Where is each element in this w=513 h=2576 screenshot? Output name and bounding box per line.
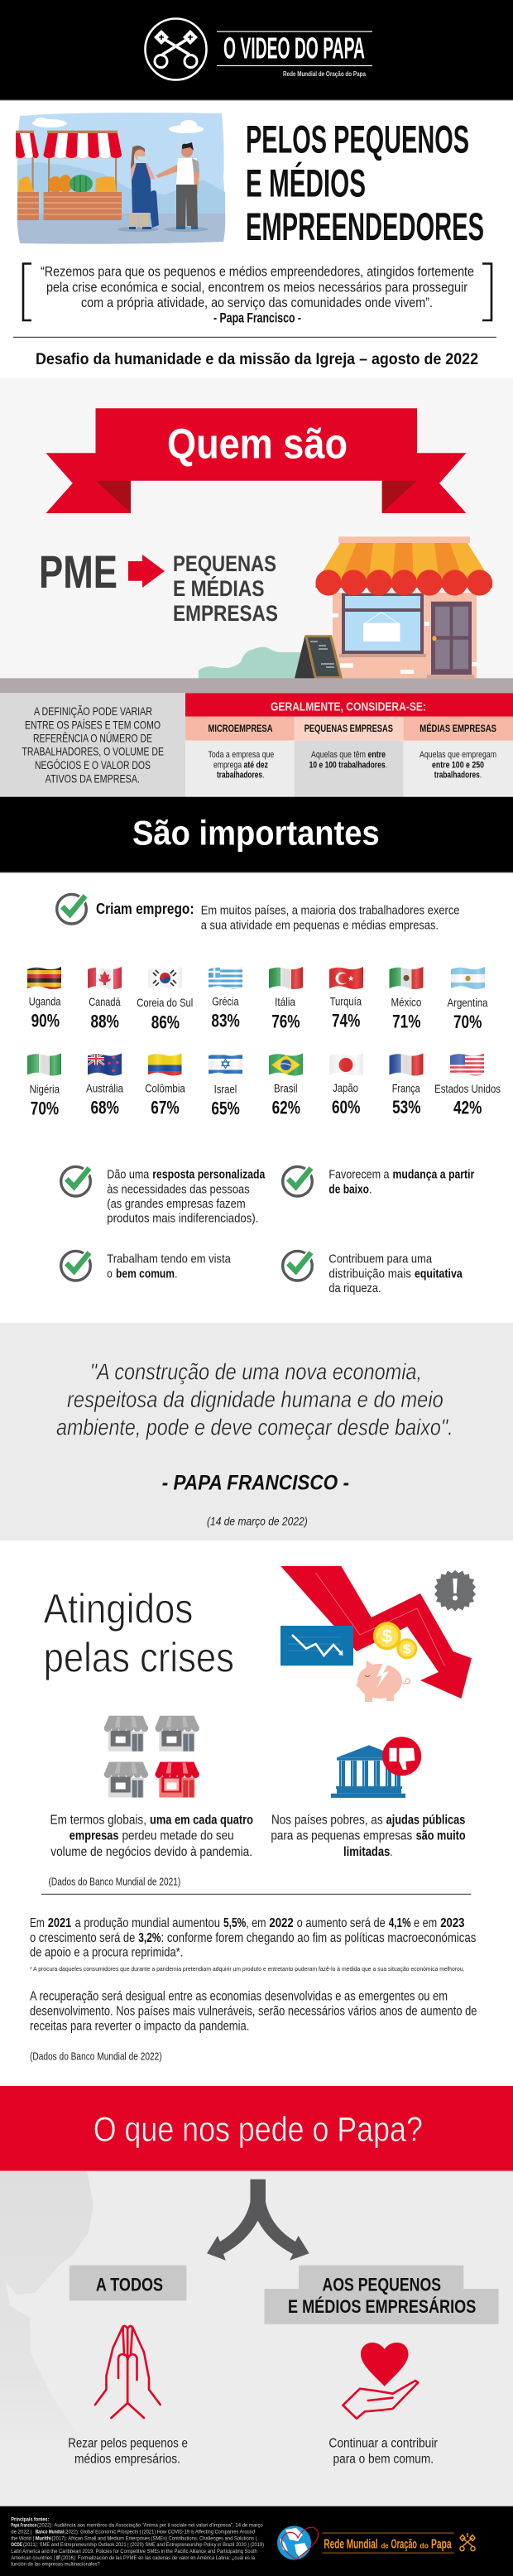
text block: world production growth: de apoio e a procura reprimida*. xyxy=(30,1946,183,1960)
country: Estados Unidos: 42% xyxy=(453,1098,482,1118)
illustration: falling arrow with coins and piggy bank xyxy=(280,1566,476,1702)
text block: world production growth: 4,1% xyxy=(389,1916,411,1930)
block: Criam emprego: Em muitos países, a maioria dos trabalhadores exerce xyxy=(201,903,460,917)
country: França: França xyxy=(392,1081,420,1094)
sources: Latin America and the Caribbean 2019. Policies for Competitive SMEs in the Pacific Alliance and Participating South xyxy=(11,2549,257,2554)
sources: (2022): Audiência aos membros da Associação "Anima per il sociale nei valori d'impresa", 14 de março xyxy=(37,2523,263,2529)
heading: Atingidos pelas crises: Atingidos xyxy=(44,1586,193,1632)
header: O Video do Papa logo: Rede Mundial de Oração do Papa xyxy=(283,70,366,78)
icon: warning burst xyxy=(434,1570,476,1611)
panel: what the Pope asks xyxy=(0,2171,513,2506)
sources: the World | xyxy=(11,2535,34,2541)
text block: world production growth: a produção mundial aumentou xyxy=(74,1916,220,1930)
table: company sizes: entre 100 e 250 xyxy=(432,760,484,770)
benefit: mudança a partir de baixo: de baixo xyxy=(328,1182,369,1196)
text block: world production growth: , em xyxy=(246,1916,266,1930)
block: limited public aid: são muito xyxy=(416,1829,466,1843)
panel: definition note: ATIVOS DA EMPRESA. xyxy=(46,771,140,785)
logo: Rede Mundial de Oração do Papa: Rede Mundial xyxy=(324,2537,378,2551)
panel: Pope quote: (14 de março de 2022) xyxy=(207,1515,308,1528)
country: Nigéria xyxy=(27,1053,61,1119)
country: Argentina: Argentina xyxy=(447,996,488,1009)
text block: uneven recovery: receitas para reverter o impacto da pandemia. xyxy=(30,2019,249,2033)
country: França xyxy=(389,1053,424,1117)
benefit: resposta personalizada: Dão uma xyxy=(107,1167,150,1181)
table: company sizes: até dez xyxy=(243,760,268,770)
sources: (2017): African Small and Medium Enterprises (SMEs) Contributions, Challenges and Solutions | xyxy=(51,2535,256,2541)
block: limited public aid: para as pequenas empresas xyxy=(271,1829,412,1843)
title xyxy=(246,118,484,249)
country: Nigéria: 70% xyxy=(31,1098,59,1119)
table: company sizes: MICROEMPRESA xyxy=(209,723,273,734)
text block: world production growth: Em xyxy=(30,1916,45,1930)
table: company sizes: . xyxy=(262,770,265,780)
block: limited public aid: . xyxy=(390,1845,392,1859)
flags chart: employment share by country, row 2 xyxy=(27,1053,501,1119)
text block: world production growth: 3,2% xyxy=(138,1931,161,1945)
table: company sizes: emprega xyxy=(213,760,242,770)
icon: heart in hand xyxy=(343,2343,418,2419)
block: limited public aid: limitadas xyxy=(343,1845,390,1859)
country: Uganda: 90% xyxy=(31,1011,60,1031)
country: Japão: 60% xyxy=(332,1097,360,1117)
sources: función de las empresas multinacionales? xyxy=(11,2561,100,2567)
sources: American countries | xyxy=(11,2555,55,2561)
country: Colômbia xyxy=(145,1053,185,1118)
PME definition xyxy=(39,545,278,626)
country: Coreia do Sul: 86% xyxy=(151,1012,180,1032)
block: A todos: Rezar pelos pequenos e xyxy=(68,2437,188,2451)
block: Aos pequenos e médios empresários: Continuar a contribuir xyxy=(328,2437,438,2451)
icon: crossed keys emblem xyxy=(146,18,207,79)
country: Argentina xyxy=(447,966,488,1032)
country: Canadá xyxy=(88,966,122,1031)
block: Aos pequenos e médios empresários: E MÉDIOS EMPRESÁRIOS xyxy=(288,2296,476,2317)
sources: de 2022 | xyxy=(11,2529,32,2535)
illustration: shop xyxy=(199,536,492,679)
country: Itália: 76% xyxy=(271,1011,300,1031)
block: limited public aid: Nos países pobres, as xyxy=(271,1813,383,1827)
benefit: resposta personalizada: resposta personalizada xyxy=(152,1167,266,1181)
PME definition: PME xyxy=(39,545,117,598)
panel: definition note: ENTRE OS PAÍSES E TEM COMO xyxy=(25,718,161,731)
table: company sizes: 10 e 100 trabalhadores xyxy=(309,760,386,770)
source: World Bank 2021: (Dados do Banco Mundial de 2021) xyxy=(48,1877,180,1888)
block: Criam emprego: Criam emprego: xyxy=(96,901,194,917)
sources: (2022): Global Economic Prospects | (2021) How COVID-19 is Affecting Companies Around xyxy=(65,2529,255,2535)
country: Colômbia: 67% xyxy=(151,1098,180,1118)
text block: world production growth: 2022 xyxy=(269,1916,294,1930)
heading: Atingidos pelas crises: pelas crises xyxy=(44,1634,234,1680)
block: one in four businesses: volume de negócios devido à pandemia. xyxy=(50,1845,252,1859)
block: Aos pequenos e médios empresários: para o bem comum. xyxy=(333,2452,434,2466)
block: limited public aid: ajudas públicas xyxy=(386,1813,465,1827)
country: Canadá: Canadá xyxy=(89,995,121,1008)
panel: Pope quote: respeitosa da dignidade humana e do meio xyxy=(67,1387,443,1412)
sources: (2016): Formalización de las PYME en las cadenas de valor en América Latina: ¿cuál es la xyxy=(61,2555,255,2561)
benefit: mudança a partir de baixo xyxy=(283,1166,474,1196)
sources: Banco Mundial xyxy=(36,2529,64,2535)
block: Criam emprego: a sua atividade em pequenas e médias empresas. xyxy=(201,918,439,932)
block: one in four businesses: uma em cada quatro xyxy=(150,1813,253,1827)
country: México: 71% xyxy=(392,1011,420,1031)
icon: four shops, one red xyxy=(104,1716,199,1798)
table: company sizes: trabalhadores xyxy=(434,770,480,780)
benefit: resposta personalizada: (as grandes empresas fazem xyxy=(107,1197,246,1211)
country: Uganda: Uganda xyxy=(29,995,61,1008)
panel: Pope quote: - PAPA FRANCISCO - xyxy=(162,1471,349,1494)
heading ribbon: Quem são: Quem são xyxy=(167,420,348,467)
country: Colômbia: Colômbia xyxy=(145,1081,185,1094)
subtitle: monthly challenge: Desafio da humanidade e da missão da Igreja – agosto de 2022 xyxy=(36,350,478,368)
benefit: resposta personalizada xyxy=(61,1166,266,1226)
benefit: distribuição equitativa: distribuição mais xyxy=(328,1266,411,1281)
country: Turquía: Turquía xyxy=(330,995,362,1008)
panel: definition note: NEGÓCIOS E O VALOR DOS xyxy=(35,758,151,771)
country: Austrália: 68% xyxy=(91,1098,119,1118)
panel: Pope quote xyxy=(0,1323,513,1540)
country: Coreia do Sul xyxy=(137,966,193,1032)
country: Grécia: Grécia xyxy=(212,994,239,1007)
icon: coins: $ xyxy=(403,1642,411,1657)
sources: (2021): SME and Entrepreneurship Outlook 2021 | (2020) SME and Entrepreneurship Policy in Brazil 2020 | (2019) xyxy=(23,2542,264,2548)
PME definition: EMPRESAS xyxy=(173,601,278,626)
panel: definition note xyxy=(0,693,185,797)
flags chart: employment share by country, row 1 xyxy=(27,966,488,1032)
benefit: resposta personalizada: produtos mais indiferenciados). xyxy=(107,1212,258,1226)
block: one in four businesses xyxy=(50,1716,253,1859)
icon: check xyxy=(61,1166,90,1196)
sources: Papa Francisco xyxy=(11,2523,36,2529)
split arrow xyxy=(207,2180,309,2261)
country: Itália xyxy=(269,966,303,1031)
icon: coins: $ xyxy=(382,1626,392,1646)
block: A todos: A TODOS xyxy=(96,2274,163,2295)
footer xyxy=(0,2506,513,2576)
block: A todos: médios empresários. xyxy=(74,2452,180,2466)
prayer quote with brackets xyxy=(23,263,491,325)
country: Uganda xyxy=(27,966,61,1031)
country: Japão: Japão xyxy=(333,1081,358,1094)
heading: São importantes xyxy=(0,797,513,872)
country: Austrália xyxy=(86,1053,123,1118)
block: one in four businesses: empresas xyxy=(70,1829,119,1843)
country: França: 53% xyxy=(392,1097,420,1117)
heading band: O que nos pede o Papa?: O que nos pede o Papa? xyxy=(93,2110,423,2149)
text block: world production growth: 5,5% xyxy=(223,1916,246,1930)
icon: globe with heart xyxy=(277,2526,319,2559)
prayer quote with brackets: - Papa Francisco - xyxy=(213,310,301,325)
heading ribbon: Quem são xyxy=(46,408,467,513)
block: Aos pequenos e médios empresários: AOS PEQUENOS xyxy=(323,2274,441,2295)
sources: Murithi xyxy=(36,2535,51,2541)
country: Austrália: Austrália xyxy=(86,1081,123,1094)
table: company sizes: . xyxy=(480,770,482,780)
benefit: mudança a partir de baixo: Favorecem a xyxy=(328,1167,390,1181)
benefit: distribuição equitativa xyxy=(283,1251,463,1295)
benefit: bem comum: . xyxy=(175,1266,178,1281)
country: Canadá: 88% xyxy=(91,1011,119,1031)
icon: chart card xyxy=(280,1626,353,1665)
icon: bank with thumbs down xyxy=(331,1737,421,1798)
illustration: market stall handshake xyxy=(16,113,225,244)
heading: São importantes: São importantes xyxy=(132,814,380,853)
sources: OIT xyxy=(56,2555,60,2561)
benefit: distribuição equitativa: Contribuem para uma xyxy=(328,1252,433,1266)
pope silhouette xyxy=(0,2171,93,2463)
icon: check xyxy=(61,1251,90,1281)
block: Aos pequenos e médios empresários xyxy=(265,2266,499,2466)
sources xyxy=(11,2517,264,2567)
benefit: mudança a partir de baixo: mudança a partir xyxy=(392,1167,474,1181)
country: Estados Unidos xyxy=(434,1053,501,1118)
table: company sizes: GERALMENTE, CONSIDERA-SE: xyxy=(271,699,426,714)
text block: uneven recovery xyxy=(30,1990,477,2033)
header: O Video do Papa logo xyxy=(0,0,513,101)
country: Israel xyxy=(209,1053,242,1119)
country: Nigéria: Nigéria xyxy=(30,1083,60,1096)
country: Grécia: 83% xyxy=(211,1010,240,1031)
panel: Pope quote: "A construção de uma nova economia, xyxy=(90,1359,422,1385)
text block: world production growth: 2021 xyxy=(48,1916,72,1930)
icon: keys xyxy=(460,2533,475,2551)
title: E MÉDIOS xyxy=(246,161,366,205)
block: Criam emprego xyxy=(57,894,459,932)
benefit: bem comum xyxy=(61,1251,231,1281)
icon: check xyxy=(283,1166,312,1196)
block: A todos xyxy=(68,2266,188,2466)
text block: world production growth: o crescimento será de xyxy=(30,1931,135,1945)
table: company sizes xyxy=(185,693,513,797)
PME definition: E MÉDIAS xyxy=(173,575,265,601)
panel: definition note: REFERÊNCIA O NÚMERO DE xyxy=(33,732,152,745)
country: Itália: Itália xyxy=(275,995,295,1008)
benefit: distribuição equitativa: equitativa xyxy=(415,1266,463,1281)
benefit: bem comum: o xyxy=(107,1266,113,1281)
panel: definition note: A DEFINIÇÃO PODE VARIAR xyxy=(34,704,152,718)
country: Turquía xyxy=(329,966,363,1031)
benefit: bem comum: bem comum xyxy=(116,1266,175,1281)
logo: Rede Mundial de Oração do Papa: Oração xyxy=(391,2537,417,2551)
panel: Quem são xyxy=(0,378,513,693)
footnote: * A procura daqueles consumidores que durante a pandemia pretendiam adquirir um produto e entretanto puderam fazê-lo à medida que a sua situação económica melhorou. xyxy=(30,1965,465,1973)
sources: OCDE xyxy=(11,2542,22,2548)
table: company sizes: trabalhadores xyxy=(217,770,262,780)
logo: Rede Mundial de Oração do Papa: de xyxy=(381,2541,388,2550)
logo: Rede Mundial de Oração do Papa xyxy=(277,2526,475,2559)
icon: check xyxy=(57,894,86,924)
table: company sizes: . xyxy=(386,760,387,770)
icon: check xyxy=(283,1251,312,1281)
table: company sizes: PEQUENAS EMPRESAS xyxy=(304,723,393,734)
block: one in four businesses: Em termos globais, xyxy=(50,1813,146,1827)
benefit: resposta personalizada: às necessidades das pessoas xyxy=(107,1182,250,1196)
logo: Rede Mundial de Oração do Papa: do xyxy=(420,2541,429,2550)
icon: broken piggy bank xyxy=(356,1660,410,1702)
sources: Principais fontes: xyxy=(11,2517,49,2523)
country: Argentina: 70% xyxy=(453,1012,482,1032)
table: company sizes: entre xyxy=(367,750,386,760)
country: México xyxy=(389,966,424,1031)
benefit: mudança a partir de baixo: . xyxy=(369,1182,372,1196)
country: Israel: Israel xyxy=(214,1083,237,1096)
heading band: O que nos pede o Papa? xyxy=(0,2086,513,2171)
country: Japão xyxy=(329,1053,363,1117)
country: México: México xyxy=(391,995,421,1008)
text block: world production growth: 2023 xyxy=(440,1916,465,1930)
heading: Atingidos pelas crises xyxy=(44,1586,234,1680)
country: Brasil: 62% xyxy=(272,1098,300,1118)
table: company sizes: Aquelas que têm xyxy=(311,750,366,760)
benefit: distribuição equitativa: da riqueza. xyxy=(328,1281,381,1295)
icon: coins xyxy=(373,1622,417,1659)
PME definition: PEQUENAS xyxy=(173,551,276,576)
logo: Rede Mundial de Oração do Papa: Papa xyxy=(431,2537,452,2551)
source: World Bank 2022: (Dados do Banco Mundial de 2022) xyxy=(30,2050,162,2062)
block: one in four businesses: perdeu metade do seu xyxy=(122,1829,234,1843)
country: Israel: 65% xyxy=(211,1098,240,1119)
country: Coreia do Sul: Coreia do Sul xyxy=(137,996,193,1009)
header: O Video do Papa logo: O VIDEO DO PAPA xyxy=(223,31,365,65)
benefit: bem comum: Trabalham tendo em vista xyxy=(107,1252,231,1266)
prayer quote with brackets: com a própria atividade, ao serviço das comunidades onde vivem”. xyxy=(81,296,433,310)
panel: definition note: TRABALHADORES, O VOLUME DE xyxy=(22,745,164,758)
table: company sizes: Toda a empresa que xyxy=(209,750,274,760)
country: Turquía: 74% xyxy=(332,1011,360,1031)
arrow xyxy=(128,555,165,588)
ground band xyxy=(0,678,513,693)
text block: world production growth: o aumento será de xyxy=(297,1916,386,1930)
block: limited public aid xyxy=(271,1737,466,1859)
icon: praying hands xyxy=(95,2326,161,2418)
text block: world production growth: e em xyxy=(414,1916,437,1930)
country: Brasil xyxy=(269,1053,303,1118)
text block: world production growth xyxy=(30,1916,477,1973)
country: Brasil: Brasil xyxy=(274,1081,298,1094)
country: Grécia xyxy=(209,966,242,1031)
